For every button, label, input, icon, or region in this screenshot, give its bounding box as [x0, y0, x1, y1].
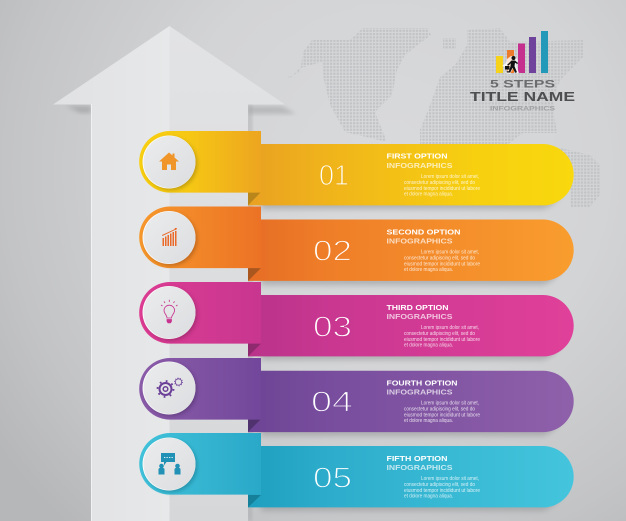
dotted world map	[288, 28, 600, 207]
bar	[248, 371, 574, 432]
body text: consectetur adipiscing elit, sed do	[404, 331, 475, 337]
step 1: first option	[139, 131, 574, 209]
tab	[139, 131, 261, 193]
number 04: 04	[311, 386, 353, 418]
icon: people talking	[158, 453, 180, 474]
number 03: 03	[313, 312, 352, 344]
bar shadow	[261, 377, 564, 436]
body text: Lorem ipsum dolor sit amet,	[421, 250, 479, 256]
body text: eiusmod tempor incididunt ut labore	[404, 488, 480, 494]
large upward arrow	[53, 26, 296, 521]
body text: eiusmod tempor incididunt ut labore	[404, 337, 480, 343]
step 5: fifth option	[139, 433, 574, 511]
body text: et dolore magna aliqua.	[404, 342, 453, 348]
body text: Lorem ipsum dolor sit amet,	[421, 325, 479, 331]
heading: FOURTH OPTION	[386, 378, 458, 388]
body text	[404, 325, 480, 348]
subheading: INFOGRAPHICS	[386, 463, 453, 472]
body text: eiusmod tempor incididunt ut labore	[404, 412, 480, 418]
body text: et dolore magna aliqua.	[404, 494, 453, 500]
body text: consectetur adipiscing elit, sed do	[404, 482, 475, 488]
icon: house	[159, 152, 179, 170]
heading: THIRD OPTION	[386, 303, 448, 312]
body text	[404, 174, 480, 198]
body text	[404, 476, 480, 500]
tab	[139, 433, 261, 495]
icon: gears	[158, 378, 182, 397]
icon: rising bars	[496, 31, 548, 73]
subheading: INFOGRAPHICS	[386, 312, 453, 321]
bar shadow	[261, 150, 564, 209]
body text: et dolore magna aliqua.	[404, 418, 453, 424]
tab	[139, 206, 261, 268]
bar	[248, 220, 574, 281]
bar shadow	[261, 226, 564, 285]
bar shadow	[261, 301, 564, 360]
subheading: INFOGRAPHICS	[386, 388, 453, 396]
subheading: INFOGRAPHICS	[386, 161, 453, 170]
body text: et dolore magna aliqua.	[404, 267, 453, 273]
circle	[142, 438, 197, 492]
bar	[248, 295, 574, 356]
fold	[248, 268, 261, 281]
title line 5 steps: 5 STEPS	[490, 78, 555, 90]
fold	[248, 495, 261, 507]
heading: FIFTH OPTION	[386, 454, 448, 463]
body text: eiusmod tempor incididunt ut labore	[404, 186, 480, 192]
bar shadow	[261, 452, 564, 511]
body text: consectetur adipiscing elit, sed do	[404, 256, 475, 262]
body text	[404, 400, 480, 424]
circle	[142, 136, 197, 190]
title block	[470, 31, 575, 112]
heading: FIRST OPTION	[386, 152, 448, 160]
body text	[404, 250, 480, 273]
circle	[142, 211, 197, 266]
circle	[142, 286, 197, 340]
infographics caption: INFOGRAPHICS	[490, 106, 556, 112]
fold	[248, 344, 261, 356]
body text: Lorem ipsum dolor sit amet,	[421, 400, 479, 406]
title line title name: TITLE NAME	[470, 90, 575, 104]
step 2: second option	[139, 206, 574, 285]
fold	[248, 419, 261, 432]
icon: light bulb	[161, 300, 178, 323]
body text: et dolore magna aliqua.	[404, 192, 453, 198]
bar	[248, 144, 574, 205]
bar	[248, 446, 574, 507]
body text: Lorem ipsum dolor sit amet,	[421, 476, 479, 482]
circle	[142, 362, 197, 416]
number 01: 01	[319, 160, 349, 192]
body text: consectetur adipiscing elit, sed do	[404, 406, 475, 412]
step 3: third option	[139, 282, 574, 360]
icon: growth chart	[162, 228, 177, 246]
heading: SECOND OPTION	[386, 228, 460, 236]
fold	[248, 192, 261, 205]
number 02: 02	[313, 236, 352, 268]
subheading: INFOGRAPHICS	[386, 236, 453, 246]
step 4: fourth option	[139, 358, 574, 436]
body text: eiusmod tempor incididunt ut labore	[404, 262, 480, 268]
body text: consectetur adipiscing elit, sed do	[404, 180, 475, 186]
number 05: 05	[313, 462, 352, 494]
tab	[139, 358, 261, 420]
tab	[139, 282, 261, 344]
body text: Lorem ipsum dolor sit amet,	[421, 174, 479, 180]
icon: running businessman	[502, 56, 519, 74]
